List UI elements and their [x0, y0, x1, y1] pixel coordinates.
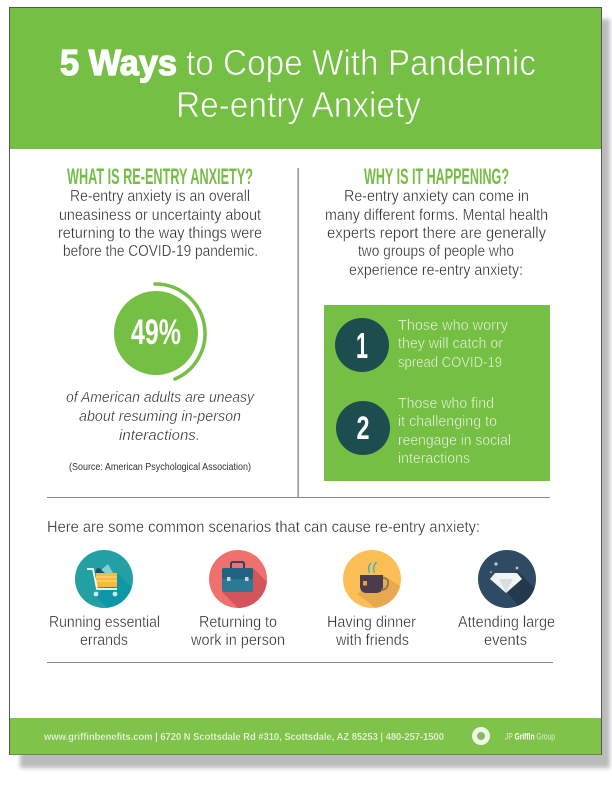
text block: stat caption: interactions.: [119, 428, 200, 444]
text block: definition: [58, 188, 262, 260]
stat: 49 percent donut: [114, 284, 205, 379]
label: work: Returning to: [199, 614, 277, 631]
scenarios intro: Here are some common scenarios that can cause re-entry anxiety:: [47, 519, 480, 536]
group 1 text: Those who worry: [398, 317, 508, 334]
text block: definition: returning to the way things were: [58, 225, 262, 242]
number badge 1: [335, 318, 389, 372]
text block: why: experience re-entry anxiety:: [349, 262, 523, 279]
number badge 1: 1: [356, 325, 368, 366]
text block: definition: uneasiness or uncertainty about: [59, 207, 262, 224]
panel: two groups: [324, 305, 550, 481]
number badge 2: [336, 401, 390, 455]
text block: definition: Re-entry anxiety is an overall: [70, 188, 250, 205]
label: errands: errands: [80, 632, 128, 649]
text block: stat caption: [66, 390, 255, 444]
text block: why: two groups of people who: [358, 243, 514, 260]
group 2 text: interactions: [398, 450, 470, 467]
title: to Cope With Pandemic: [186, 42, 536, 83]
text block: definition: before the COVID-19 pandemic.: [63, 243, 258, 260]
icon: shopping cart: [75, 550, 133, 608]
stat: 49 percent donut: 49%: [131, 313, 181, 352]
group 1 text: [398, 317, 508, 371]
icon: briefcase: [209, 550, 267, 608]
group 1 text: they will catch or: [398, 335, 503, 352]
source note: (Source: American Psychological Association): [69, 462, 251, 473]
text block: why: [325, 188, 548, 279]
text block: stat caption: of American adults are uneasy: [66, 390, 255, 406]
heading: why is it happening: WHY IS IT HAPPENING?: [364, 164, 509, 189]
icon: tea cup: [343, 550, 401, 608]
title: 5 Ways: [60, 42, 177, 83]
text block: why: many different forms. Mental health: [325, 207, 548, 224]
label: dinner: with friends: [335, 632, 409, 649]
label: dinner: Having dinner: [327, 614, 416, 631]
logo: [474, 730, 555, 742]
text block: stat caption: about resuming in-person: [79, 409, 241, 425]
label: errands: Running essential: [49, 614, 160, 631]
title: [60, 42, 536, 125]
label: events: [458, 614, 555, 649]
label: errands: [49, 614, 160, 649]
group 2 text: Those who find: [398, 395, 494, 412]
footer bar: [10, 718, 601, 754]
group 2 text: it challenging to: [398, 413, 497, 430]
group 1 text: spread COVID-19: [398, 354, 502, 371]
label: dinner: [327, 614, 416, 649]
header banner: [10, 8, 601, 149]
label: work: work in person: [190, 632, 285, 649]
group 2 text: reengage in social: [398, 432, 511, 449]
vertical divider: [298, 168, 299, 497]
title: Re-entry Anxiety: [176, 84, 421, 125]
footer contact text: www.griffinbenefits.com | 6720 N Scottsdale Rd #310, Scottsdale, AZ 85253 | 480-257-1500: [43, 732, 444, 743]
label: events: Attending large: [458, 614, 555, 631]
label: work: [190, 614, 285, 649]
icon: diamond: [478, 550, 536, 608]
number badge 2: 2: [356, 410, 370, 446]
logo: JP Griffin Group: [505, 732, 555, 742]
text block: why: experts report there are generally: [327, 225, 546, 242]
group 2 text: [398, 395, 511, 467]
heading: what is re-entry anxiety: WHAT IS RE-ENTRY ANXIETY?: [67, 164, 253, 189]
label: events: events: [484, 632, 527, 649]
text block: why: Re-entry anxiety can come in: [344, 188, 529, 205]
